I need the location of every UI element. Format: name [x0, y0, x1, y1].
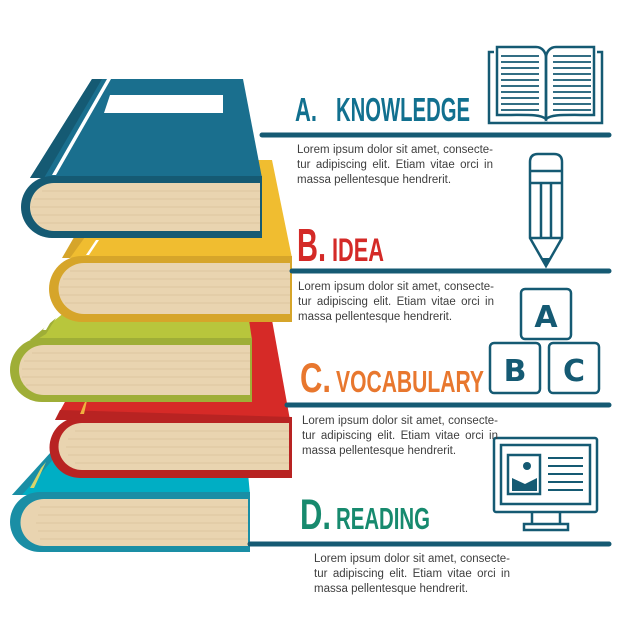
icon: ABC blocks: B — [504, 354, 526, 389]
icon: ABC blocks: C — [563, 354, 585, 389]
text block A: Lorem ipsum dolor sit amet, consecte-tur adipiscing elit. Etiam vitae orci in massa pellentesque hendrerit. — [297, 144, 493, 186]
icon: ABC blocks — [488, 288, 600, 394]
text block D: Lorem ipsum dolor sit amet, consecte-tur adipiscing elit. Etiam vitae orci in massa pellentesque hendrerit. — [314, 553, 510, 595]
book D red — [49, 320, 292, 478]
icon: ABC blocks: A — [534, 300, 558, 335]
book B yellow — [49, 160, 292, 322]
book A blue — [21, 79, 262, 238]
heading A — [295, 91, 470, 128]
book E cyan — [10, 440, 250, 552]
icon: pencil — [528, 152, 564, 268]
heading A: A. — [295, 91, 317, 128]
headings — [295, 91, 484, 539]
heading B: B. — [297, 219, 326, 271]
heading D: READING — [336, 501, 430, 536]
heading C: C. — [300, 354, 331, 401]
heading B: IDEA — [332, 232, 384, 268]
heading B — [297, 219, 384, 271]
text block B: Lorem ipsum dolor sit amet, consecte-tur adipiscing elit. Etiam vitae orci in massa pellentesque hendrerit. — [298, 281, 494, 323]
text block C: Lorem ipsum dolor sit amet, consecte-tur adipiscing elit. Etiam vitae orci in massa pellentesque hendrerit. — [302, 415, 498, 457]
icon: open book — [488, 46, 604, 124]
heading C — [300, 354, 484, 401]
heading D — [300, 491, 430, 539]
heading D: D. — [300, 491, 331, 539]
book C green — [10, 300, 252, 402]
icon: computer monitor — [492, 436, 598, 532]
